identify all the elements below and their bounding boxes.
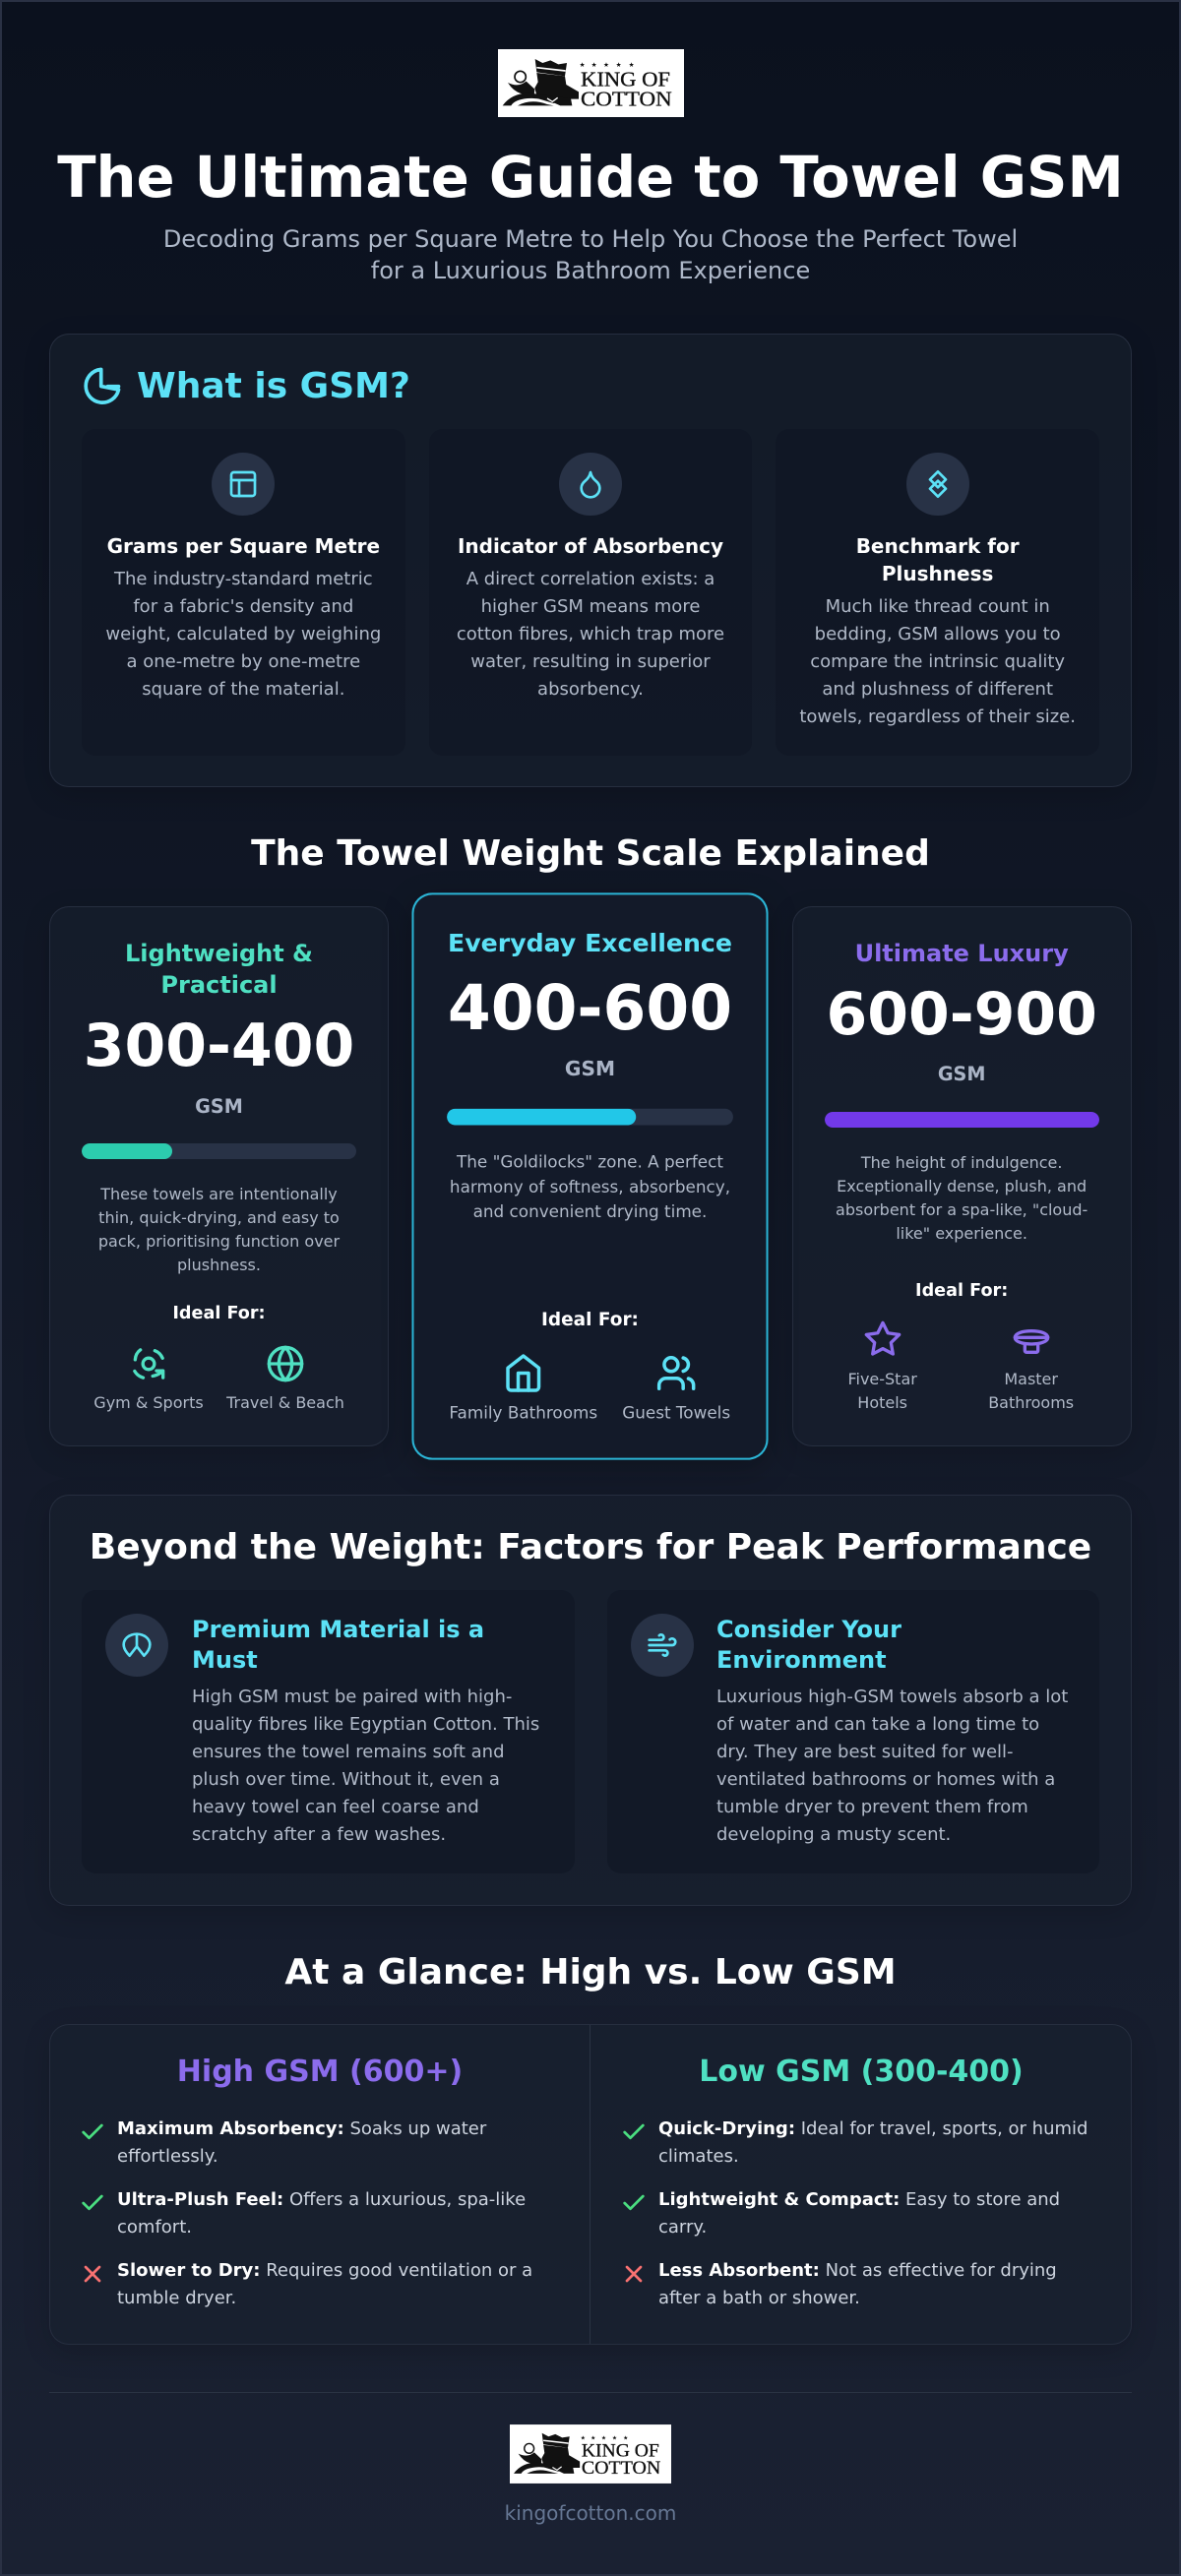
description: absorbent for a spa-like, "cloud- — [836, 1200, 1088, 1219]
card text: and plushness of different — [822, 679, 1053, 700]
logo: footer: ★ — [623, 2435, 628, 2442]
item: Slower to Dry: Requires good ventilation or a — [117, 2260, 532, 2281]
item: Maximum Absorbency: Soaks up water — [117, 2118, 486, 2139]
gsm unit: GSM — [195, 1095, 243, 1118]
card text: plush over time. Without it, even a — [192, 1769, 500, 1790]
logo: header: KING OF — [581, 67, 670, 91]
logo: header — [498, 49, 684, 117]
icon: gym — [133, 1348, 165, 1380]
tier name: Ultimate Luxury — [855, 940, 1069, 967]
card text — [799, 596, 1076, 727]
gsm range: 300-400 — [84, 1012, 354, 1080]
panel: comparison — [49, 2024, 1132, 2345]
label: gym: Gym & Sports — [93, 1393, 204, 1412]
icon: check — [623, 2194, 645, 2210]
item — [658, 2118, 1088, 2167]
card text: for a fabric's density and — [133, 596, 353, 617]
subtitle — [163, 225, 1018, 284]
logo: footer: ★ — [590, 2435, 595, 2442]
subtitle: Decoding Grams per Square Metre to Help You Choose the Perfect Towel — [163, 225, 1018, 253]
logo: footer: COTTON — [582, 2459, 660, 2479]
label: guest: Guest Towels — [623, 1403, 730, 1423]
item — [117, 2118, 486, 2167]
gsm unit: GSM — [938, 1063, 985, 1085]
panel: ultimate luxury — [792, 906, 1132, 1446]
card text: compare the intrinsic quality — [810, 651, 1065, 672]
ideal for: Ideal For: — [172, 1304, 266, 1323]
logo: footer: KING OF — [582, 2441, 659, 2461]
label: hotels: Hotels — [857, 1393, 907, 1412]
column heading: Low GSM (300-400) — [699, 2055, 1024, 2089]
card text: water, resulting in superior — [470, 651, 711, 672]
description: These towels are intentionally — [100, 1185, 338, 1203]
card text: higher GSM means more — [481, 596, 700, 617]
card text — [105, 569, 381, 700]
item — [117, 2189, 526, 2238]
item: Lightweight & Compact: Easy to store and — [658, 2189, 1060, 2210]
card text — [457, 569, 724, 700]
heading: what is GSM: What is GSM? — [137, 366, 410, 406]
description: Exceptionally dense, plush, and — [837, 1177, 1087, 1196]
card text: Luxurious high-GSM towels absorb a lot — [716, 1687, 1068, 1707]
icon: check — [82, 2123, 103, 2139]
card text: bedding, GSM allows you to — [815, 624, 1061, 644]
description — [450, 1152, 730, 1221]
card heading: Indicator of Absorbency — [458, 534, 723, 558]
icon: droplet — [559, 453, 622, 516]
logo: header: ★ — [591, 61, 597, 69]
card text: towels, regardless of their size. — [799, 706, 1076, 727]
card text: A direct correlation exists: a — [466, 569, 715, 589]
logo: header: ★ — [580, 61, 586, 69]
description: The height of indulgence. — [861, 1153, 1062, 1172]
card text: scratchy after a few washes. — [192, 1824, 446, 1845]
card text: tumble dryer to prevent them from — [716, 1797, 1028, 1817]
column: high GSM — [82, 2055, 532, 2308]
card text: developing a musty scent. — [716, 1824, 951, 1845]
description: pack, prioritising function over — [98, 1232, 340, 1251]
card heading — [856, 534, 1020, 585]
card text — [716, 1687, 1068, 1845]
ideal for: Ideal For: — [541, 1310, 639, 1330]
icon: material — [105, 1614, 168, 1677]
gsm range: 600-900 — [826, 980, 1097, 1049]
icon: users — [657, 1356, 695, 1390]
item: Ultra-Plush Feel: Offers a luxurious, spa-like — [117, 2189, 526, 2210]
description: plushness. — [177, 1256, 261, 1274]
card text: ensures the towel remains soft and — [192, 1742, 505, 1762]
logo: header: COTTON — [581, 87, 672, 110]
ideal for: Ideal For: — [915, 1281, 1008, 1301]
progress bar — [82, 1143, 356, 1159]
gsm range: 400-600 — [448, 972, 732, 1045]
tier name — [125, 940, 313, 999]
tier name: Lightweight & — [125, 940, 313, 967]
icon: check — [623, 2123, 645, 2139]
card text: absorbency. — [537, 679, 644, 700]
card heading: Premium Material is a — [192, 1616, 484, 1643]
gsm unit: GSM — [565, 1057, 615, 1080]
card text: cotton fibres, which trap more — [457, 624, 724, 644]
item — [658, 2260, 1057, 2308]
panel: everyday excellence — [412, 892, 769, 1460]
heading: at a glance: At a Glance: High vs. Low GSM — [284, 1952, 897, 1993]
icon: star — [864, 1320, 901, 1356]
card heading: Plushness — [882, 562, 993, 585]
progress bar — [825, 1112, 1099, 1128]
description — [98, 1185, 341, 1274]
card text: weight, calculated by weighing — [105, 624, 381, 644]
card heading — [716, 1616, 901, 1674]
card text: Much like thread count in — [826, 596, 1050, 617]
card: premium material — [82, 1590, 575, 1873]
icon: home — [506, 1354, 541, 1392]
item: tumble dryer. — [117, 2288, 236, 2308]
icon: check — [82, 2194, 103, 2210]
card heading: Environment — [716, 1646, 887, 1674]
label: hotels — [847, 1370, 917, 1412]
label: bathrooms — [988, 1370, 1074, 1412]
label: hotels: Five-Star — [847, 1370, 917, 1388]
panel: beyond the weight — [49, 1495, 1132, 1906]
card text: a one-metre by one-metre — [126, 651, 360, 672]
icon: wind — [630, 1614, 693, 1677]
icon: bathroom — [1014, 1329, 1049, 1354]
progress bar — [447, 1109, 734, 1126]
item: Quick-Drying: Ideal for travel, sports, or humid — [658, 2118, 1088, 2139]
card: indicator of absorbency — [429, 429, 752, 756]
label: family: Family Bathrooms — [450, 1403, 597, 1423]
icon: globe — [268, 1346, 303, 1381]
item: effortlessly. — [117, 2146, 218, 2167]
card text: of water and can take a long time to — [716, 1714, 1039, 1735]
description: and convenient drying time. — [473, 1201, 708, 1221]
tier name: Practical — [160, 971, 278, 999]
card: grams per square metre — [82, 429, 405, 756]
item — [117, 2260, 532, 2308]
heading: Beyond the Weight: Factors for Peak Performance — [90, 1527, 1091, 1567]
title: The Ultimate Guide to Towel GSM — [57, 145, 1124, 211]
card heading: Benchmark for — [856, 534, 1020, 558]
card: benchmark for plushness — [776, 429, 1099, 756]
card text: dry. They are best suited for well- — [716, 1742, 1014, 1762]
item: climates. — [658, 2146, 739, 2167]
card text — [192, 1687, 539, 1845]
tier name: Everyday Excellence — [448, 929, 732, 957]
item: Less Absorbent: Not as effective for drying — [658, 2260, 1057, 2281]
logo: header: ★ — [616, 61, 622, 69]
card: environment — [606, 1590, 1099, 1873]
description: The "Goldilocks" zone. A perfect — [457, 1152, 723, 1172]
icon: cross — [626, 2265, 642, 2283]
logo: footer — [510, 2424, 671, 2484]
description: harmony of softness, absorbency, — [450, 1177, 730, 1196]
item: comfort. — [117, 2217, 192, 2238]
label: bathrooms: Master — [1004, 1370, 1058, 1388]
icon: diamonds — [906, 453, 969, 516]
logo: footer: ★ — [601, 2435, 606, 2442]
subtitle: for a Luxurious Bathroom Experience — [371, 257, 810, 284]
card text: High GSM must be paired with high- — [192, 1687, 512, 1707]
card text: quality fibres like Egyptian Cotton. This — [192, 1714, 539, 1735]
logo: header: ★ — [629, 61, 635, 69]
card text: square of the material. — [142, 679, 344, 700]
item: carry. — [658, 2217, 707, 2238]
card heading: Grams per Square Metre — [107, 534, 380, 558]
card text: ventilated bathrooms or homes with a — [716, 1769, 1055, 1790]
icon: layout — [212, 453, 275, 516]
card heading: Must — [192, 1646, 258, 1674]
description: like" experience. — [896, 1224, 1027, 1243]
heading: towel weight scale: The Towel Weight Scale Explained — [251, 833, 930, 874]
card text: heavy towel can feel coarse and — [192, 1797, 479, 1817]
item: after a bath or shower. — [658, 2288, 860, 2308]
description — [836, 1153, 1088, 1243]
label: bathrooms: Bathrooms — [988, 1393, 1074, 1412]
card heading: Consider Your — [716, 1616, 901, 1643]
logo: footer: ★ — [612, 2435, 617, 2442]
card text: The industry-standard metric — [114, 569, 373, 589]
panel: lightweight — [49, 906, 389, 1446]
panel: what is GSM — [49, 334, 1132, 787]
icon: pie chart — [84, 368, 120, 404]
logo: header: ★ — [603, 61, 609, 69]
description: thin, quick-drying, and easy to — [98, 1208, 340, 1227]
logo: footer: ★ — [581, 2435, 586, 2442]
column heading: High GSM (600+) — [177, 2055, 463, 2089]
item — [658, 2189, 1060, 2238]
footer url: kingofcotton.com — [505, 2501, 676, 2525]
icon: cross — [85, 2265, 100, 2283]
label: travel: Travel & Beach — [226, 1393, 344, 1412]
column: low GSM — [623, 2055, 1088, 2308]
card heading — [192, 1616, 484, 1674]
